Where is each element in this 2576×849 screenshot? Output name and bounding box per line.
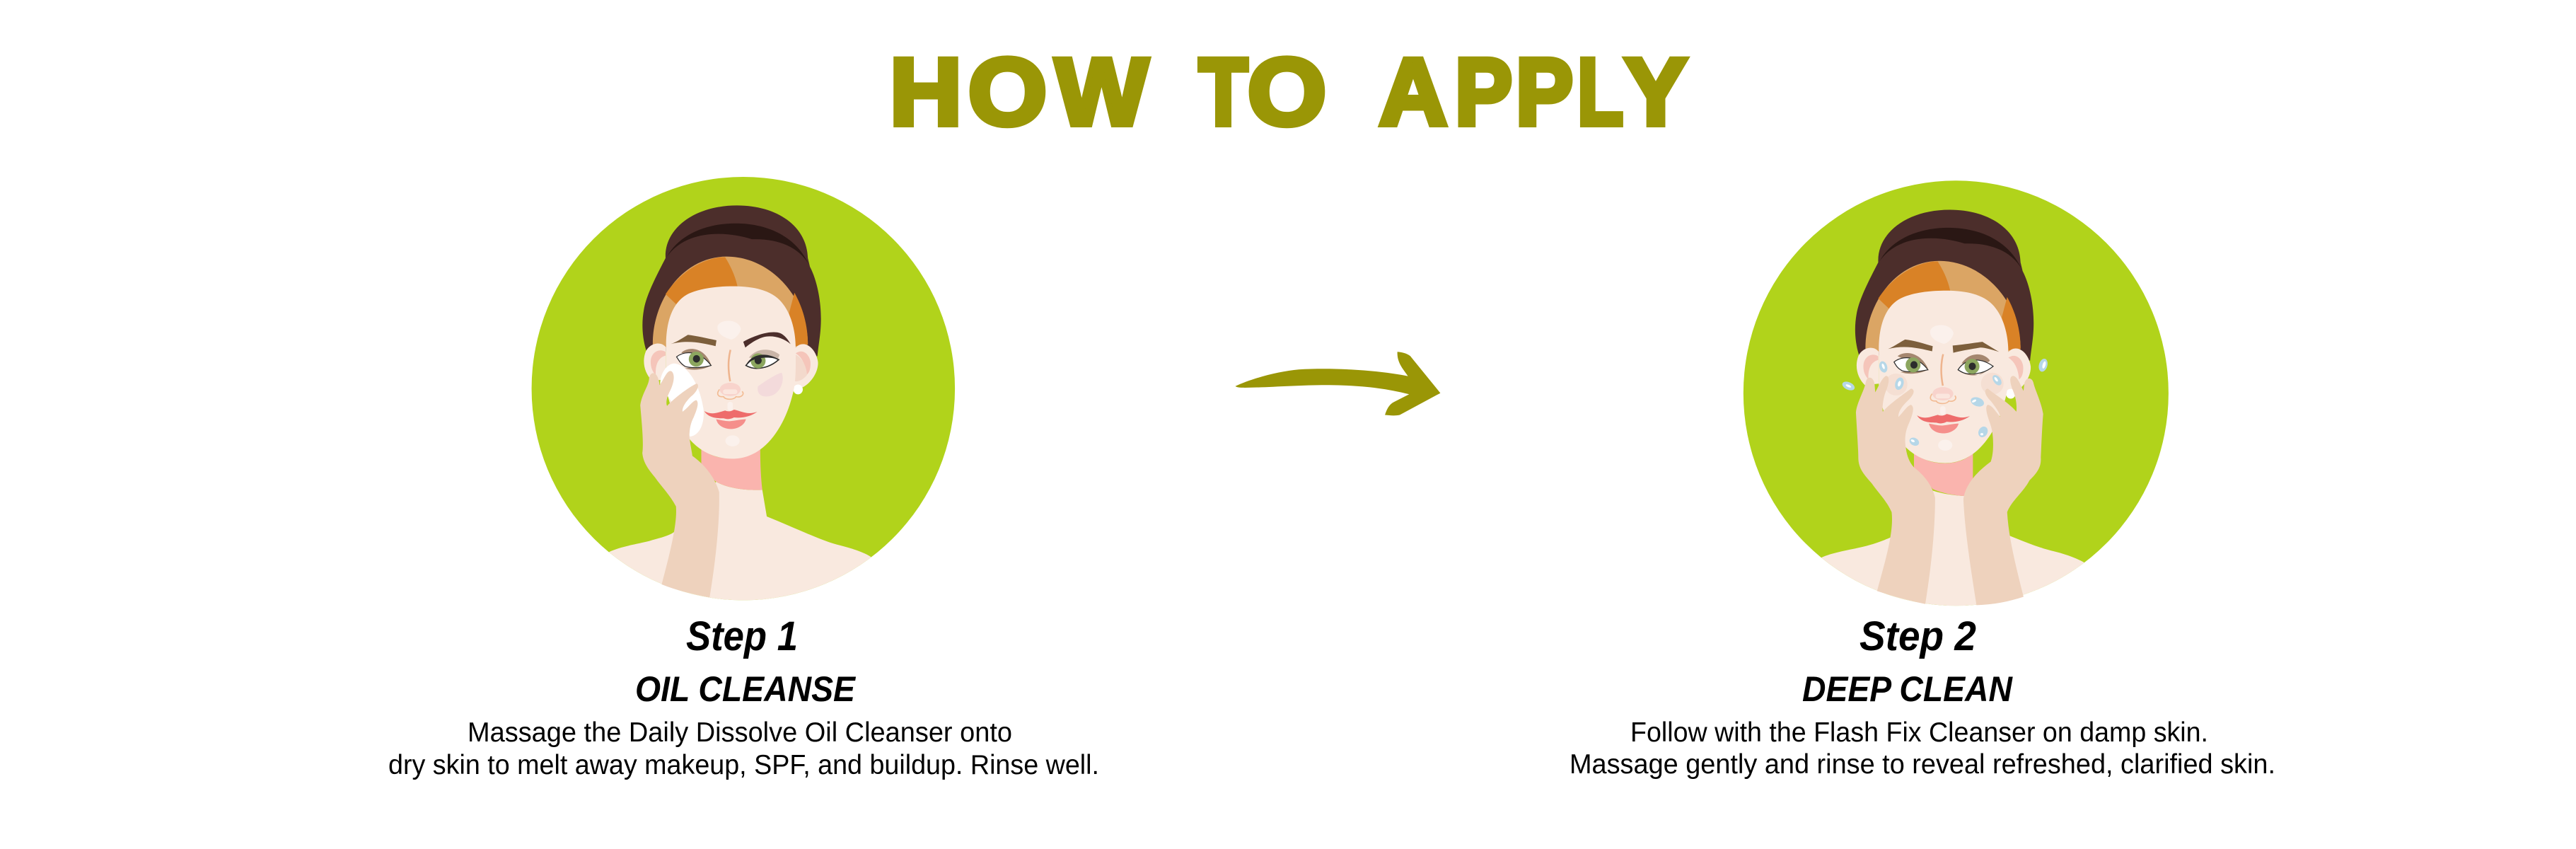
cheek foam right (1981, 373, 2004, 395)
left hand (1856, 376, 1935, 604)
right eyebrow (1953, 342, 1999, 353)
step 2 description line 1: Follow with the Flash Fix Cleanser on damp skin. (1630, 717, 2208, 748)
lips (704, 410, 758, 429)
title: O (968, 40, 1047, 145)
forehead highlight (717, 320, 741, 340)
right ear (792, 344, 818, 390)
headband shade left (666, 257, 738, 306)
nose line (1942, 354, 1943, 386)
left ear (1857, 348, 1879, 385)
blush (758, 373, 783, 396)
step 2 heading: DEEP CLEAN (1802, 669, 2013, 709)
left eye (677, 349, 711, 370)
forehead highlight (1930, 325, 1954, 344)
headband (653, 257, 808, 347)
hair shadow (1880, 228, 2021, 268)
chin highlight (726, 435, 740, 446)
text block: step 1 (388, 613, 1099, 780)
earring (794, 384, 803, 394)
step 1 description line 2: dry skin to melt away makeup, SPF, and buildup. Rinse well. (388, 750, 1099, 780)
left ear inner (651, 350, 666, 375)
left eyebrow (671, 335, 716, 346)
right ear (2004, 348, 2031, 394)
left eye (1894, 353, 1928, 374)
step 1 description line 1: Massage the Daily Dissolve Oil Cleanser onto (468, 717, 1012, 748)
headband shade left (1879, 262, 1950, 311)
cleansing pad (660, 364, 704, 437)
title: T (1199, 40, 1248, 145)
headband (1865, 261, 2021, 352)
step 2 description line 2: Massage gently and rinse to reveal refreshed, clarified skin. (1570, 749, 2275, 780)
panel: step 1 illustration (532, 177, 955, 613)
step 2 label: Step 2 (1860, 613, 1976, 659)
right eye (1958, 354, 1993, 376)
title: P (1516, 40, 1573, 145)
neck shadow (701, 449, 762, 490)
title: W (1055, 40, 1149, 145)
arrow (1236, 352, 1440, 415)
face (1879, 291, 2009, 463)
green circle background (1744, 180, 2169, 606)
lip highlight (728, 402, 733, 410)
step 1 heading: OIL CLEANSE (635, 669, 857, 709)
chin highlight (1938, 439, 1952, 451)
lips (1917, 414, 1970, 433)
title: A (1379, 40, 1447, 145)
nose (1930, 387, 1956, 403)
nose line (729, 350, 731, 381)
hair (642, 205, 821, 356)
hair shadow (667, 224, 808, 264)
title: L (1577, 40, 1623, 145)
step 1 label: Step 1 (686, 613, 798, 659)
lip highlight (1940, 406, 1946, 415)
text block: step 2 (1570, 613, 2275, 780)
green circle background (532, 177, 955, 600)
headband shade right (789, 293, 808, 346)
left ear inner (1863, 354, 1879, 379)
right hand (1963, 376, 2043, 605)
hand (640, 371, 719, 597)
water droplets (1841, 358, 2049, 447)
right ear inner (796, 352, 811, 375)
hair (1855, 210, 2033, 361)
left ear (644, 343, 666, 381)
right eye (746, 350, 779, 369)
title: Y (1625, 40, 1687, 145)
right ear inner (2008, 356, 2023, 379)
earring (2006, 389, 2016, 398)
neck shadow (1914, 453, 1973, 496)
face (666, 287, 796, 458)
shoulders (1821, 491, 2084, 606)
right ear shade (792, 354, 807, 381)
head (1855, 210, 2033, 463)
headband shade right (2002, 297, 2021, 350)
title: O (1248, 40, 1326, 145)
cheek foam left (1885, 374, 1908, 395)
nose (718, 383, 743, 399)
title: H (890, 40, 962, 145)
title: P (1455, 40, 1512, 145)
shoulders (609, 482, 871, 600)
right eyebrow (743, 333, 791, 347)
panel: step 2 illustration (1744, 180, 2169, 619)
left eyebrow (1888, 340, 1933, 352)
